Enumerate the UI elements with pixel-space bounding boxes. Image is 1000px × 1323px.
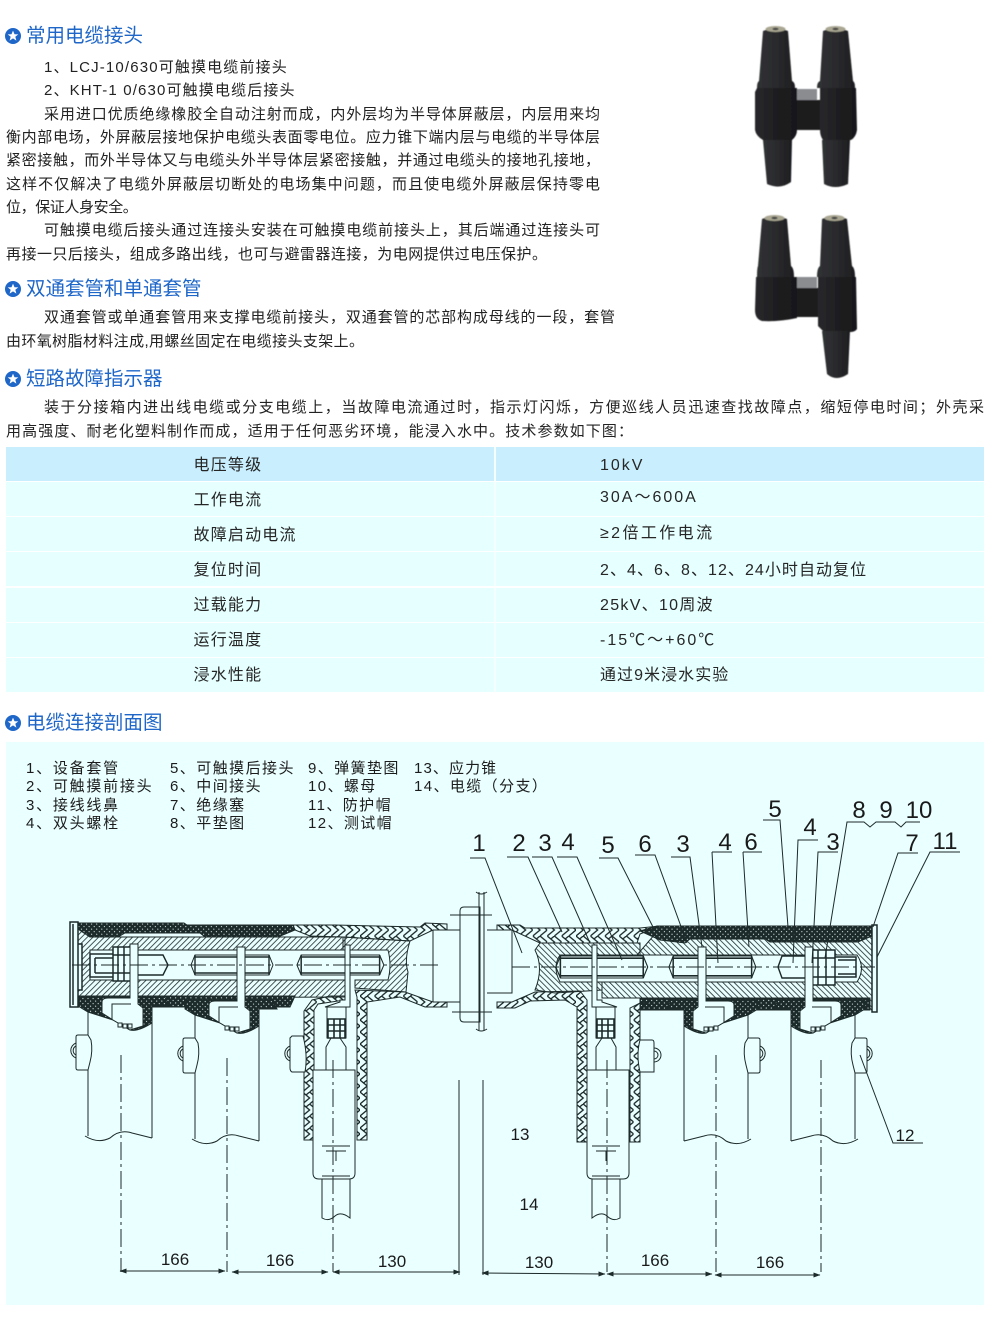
part numbers and dimensions: 4 bbox=[718, 829, 732, 856]
inner hatch body bbox=[78, 929, 345, 1002]
icon: star badge bbox=[5, 715, 21, 731]
leader lines bbox=[470, 820, 960, 1143]
part numbers and dimensions: 3 bbox=[826, 829, 840, 856]
vertical leg bbox=[313, 945, 355, 1220]
part numbers and dimensions: 7 bbox=[905, 830, 919, 857]
part numbers and dimensions: 4 bbox=[561, 829, 575, 856]
part numbers and dimensions: 12 bbox=[896, 1126, 914, 1145]
heading: fault indicator: 短路故障指示器 bbox=[26, 368, 163, 390]
left branch assembly bbox=[70, 922, 447, 1220]
text block: indicator description bbox=[6, 399, 984, 440]
herringbone sleeve bbox=[293, 923, 447, 941]
row: fault start current bbox=[6, 517, 984, 551]
legend: parts list: 4、双头螺栓 bbox=[26, 815, 120, 832]
legend: parts list: 14、电缆（分支） bbox=[414, 778, 548, 795]
row: reset time: 2、4、6、8、12、24小时自动复位 bbox=[600, 562, 867, 579]
dimension extension lines bbox=[459, 1080, 483, 1275]
legend: parts list: 11、防护帽 bbox=[308, 797, 392, 814]
part numbers and dimensions: 130 bbox=[525, 1253, 553, 1272]
row: voltage level: 10kV bbox=[600, 457, 644, 474]
heading: cross-section: 电缆连接剖面图 bbox=[26, 712, 163, 734]
row: working current bbox=[6, 482, 984, 516]
text block: indicator description: 装于分接箱内进出线电缆或分支电缆上，当故障电流通过时，指示灯闪烁，方便巡线人员迅速查找故障点，缩短停电时间；外壳采 bbox=[44, 399, 984, 416]
right branch assembly bbox=[497, 925, 877, 1220]
part numbers and dimensions: 5 bbox=[768, 796, 782, 823]
section: common cable connectors bbox=[5, 25, 600, 263]
row: fault start current: ≥2倍工作电流 bbox=[600, 525, 714, 542]
row: working current: 工作电流 bbox=[194, 492, 262, 509]
part numbers and dimensions: 3 bbox=[538, 830, 552, 857]
legend: parts list: 12、测试帽 bbox=[308, 815, 393, 832]
text block: rear connector description: 再接一只后接头，组成多路出线，也可与避雷器连接，为电网提供过电压保护。 bbox=[6, 246, 547, 263]
part numbers and dimensions: 6 bbox=[638, 831, 652, 858]
row: voltage level: 电压等级 bbox=[194, 457, 262, 474]
bolts bbox=[556, 956, 648, 978]
legend: parts list: 9、弹簧垫图 bbox=[308, 760, 400, 777]
legend: parts list: 3、接线线鼻 bbox=[26, 797, 120, 814]
part numbers and dimensions: 166 bbox=[266, 1251, 294, 1270]
row: overload capacity: 25kV、10周波 bbox=[600, 597, 714, 614]
end cap bbox=[872, 925, 877, 1012]
vertical leg bbox=[587, 945, 629, 1220]
central bushing flange bbox=[433, 892, 512, 1031]
row: reset time: 复位时间 bbox=[194, 562, 262, 579]
part numbers and dimensions: 3 bbox=[676, 831, 690, 858]
table: technical parameters bbox=[6, 447, 984, 692]
text block: bushing description bbox=[6, 309, 615, 350]
center lines bbox=[72, 965, 875, 1272]
row: overload capacity: 过载能力 bbox=[194, 597, 262, 614]
part numbers and dimensions: 166 bbox=[756, 1253, 784, 1272]
part numbers and dimensions: 130 bbox=[378, 1252, 406, 1271]
row: fault start current: 故障启动电流 bbox=[194, 527, 297, 544]
row: operating temperature: 运行温度 bbox=[194, 632, 262, 649]
row: immersion performance: 通过9米浸水实验 bbox=[600, 667, 729, 684]
part numbers and dimensions: 8 bbox=[852, 797, 866, 824]
legend: parts list: 1、设备套管 bbox=[26, 760, 120, 777]
text block: front connector description: 采用进口优质绝缘橡胶全自动注射而成，内外层均为半导体屏蔽层，内层用来均 bbox=[44, 106, 600, 123]
right hatch block bbox=[343, 937, 410, 992]
heading: common cable connectors: 常用电缆接头 bbox=[26, 25, 143, 47]
row: operating temperature bbox=[6, 623, 984, 657]
part numbers and dimensions: 166 bbox=[161, 1250, 189, 1269]
part numbers and dimensions: 5 bbox=[601, 832, 615, 859]
cross-hatched sleeve bbox=[78, 923, 295, 937]
legend: parts list: 7、绝缘塞 bbox=[170, 797, 246, 814]
text block: front connector description bbox=[6, 106, 600, 216]
cross-hatched sleeve bbox=[640, 926, 872, 943]
row: operating temperature: -15℃～+60℃ bbox=[600, 632, 716, 649]
text: connector item 1: 1、LCJ-10/630可触摸电缆前接头 bbox=[44, 59, 288, 76]
row: immersion performance: 浸水性能 bbox=[194, 667, 262, 684]
text block: front connector description: 位，保证人身安全。 bbox=[6, 199, 137, 216]
row: voltage level bbox=[6, 447, 984, 481]
hatch block bbox=[535, 943, 640, 993]
product photos: two black connectors bbox=[754, 25, 858, 379]
indicator bbox=[638, 1040, 654, 1072]
connector: double through bbox=[755, 26, 857, 187]
text: connector item 2: 2、KHT-1 0/630可触摸电缆后接头 bbox=[44, 82, 296, 99]
section: short-circuit fault indicator bbox=[5, 368, 984, 440]
row: immersion performance bbox=[6, 658, 984, 692]
row: working current: 30A～600A bbox=[600, 489, 698, 506]
text block: front connector description: 这样不仅解决了电缆外屏蔽层切断处的电场集中问题，而且使电缆外屏蔽层保持零电 bbox=[6, 176, 600, 193]
part numbers and dimensions: 13 bbox=[511, 1125, 529, 1144]
section: bushings bbox=[5, 278, 615, 350]
text block: rear connector description: 可触摸电缆后接头通过连接头安装在可触摸电缆前接头上，其后端通过连接头可 bbox=[44, 222, 600, 239]
part numbers and dimensions: 14 bbox=[520, 1195, 538, 1214]
text block: front connector description: 衡内部电场，外屏蔽层接地保护电缆头表面零电位。应力锥下端内层与电缆的半导体层 bbox=[6, 129, 600, 146]
text block: bushing description: 由环氧树脂材料注成,用螺丝固定在电缆接头支架上。 bbox=[6, 333, 364, 350]
panel: cross-section diagram bbox=[6, 742, 984, 1305]
part numbers and dimensions: 9 bbox=[879, 797, 893, 824]
cables bbox=[666, 947, 765, 1144]
legend: parts list: 2、可触摸前接头 bbox=[26, 778, 153, 795]
legend: parts list: 10、螺母 bbox=[308, 778, 377, 795]
indicator bbox=[290, 1036, 306, 1072]
legend: parts list bbox=[26, 760, 548, 832]
lower cross-hatched band bbox=[78, 996, 295, 1007]
herringbone sleeve bbox=[497, 925, 660, 943]
heading: bushings: 双通套管和单通套管 bbox=[26, 278, 202, 300]
part numbers and dimensions bbox=[161, 796, 957, 1272]
part numbers and dimensions: 6 bbox=[744, 829, 758, 856]
lower cross-hatched band bbox=[640, 998, 870, 1010]
icon: star badge bbox=[5, 371, 21, 387]
connector: single through bbox=[755, 215, 857, 378]
part numbers and dimensions: 2 bbox=[512, 830, 526, 857]
part numbers and dimensions: 166 bbox=[641, 1251, 669, 1270]
text block: bushing description: 双通套管或单通套管用来支撑电缆前接头，双通套管的芯部构成母线的一段，套管 bbox=[44, 309, 615, 326]
dimension lines bbox=[120, 1271, 820, 1275]
nut bbox=[812, 950, 856, 985]
legend: parts list: 13、应力锥 bbox=[414, 760, 497, 777]
row: overload capacity bbox=[6, 588, 984, 622]
text block: indicator description: 用高强度、耐老化塑料制作而成，适用于任何恶劣环境，能浸入水中。技术参数如下图： bbox=[6, 423, 633, 440]
legend: parts list: 5、可触摸后接头 bbox=[170, 760, 295, 777]
legend: parts list: 8、平垫图 bbox=[170, 815, 246, 832]
icon: star badge bbox=[5, 28, 21, 44]
part numbers and dimensions: 11 bbox=[933, 828, 957, 855]
part numbers and dimensions: 4 bbox=[803, 814, 817, 841]
icon: star badge bbox=[5, 281, 21, 297]
text block: rear connector description bbox=[6, 222, 600, 263]
end cap bbox=[70, 922, 82, 1007]
part numbers and dimensions: 1 bbox=[472, 830, 486, 857]
nut bbox=[90, 947, 133, 981]
legend: parts list: 6、中间接头 bbox=[170, 778, 262, 795]
section heading: cable connection cross-section bbox=[5, 712, 163, 734]
text block: front connector description: 紧密接触，而外半导体又与电缆头外半导体层紧密接触，并通过电缆头的接地孔接地， bbox=[6, 152, 600, 169]
cables bbox=[71, 944, 170, 1141]
row: reset time bbox=[6, 552, 984, 586]
part numbers and dimensions: 10 bbox=[906, 797, 932, 824]
bolts bbox=[191, 955, 273, 975]
inner hatch body bbox=[602, 934, 872, 1010]
